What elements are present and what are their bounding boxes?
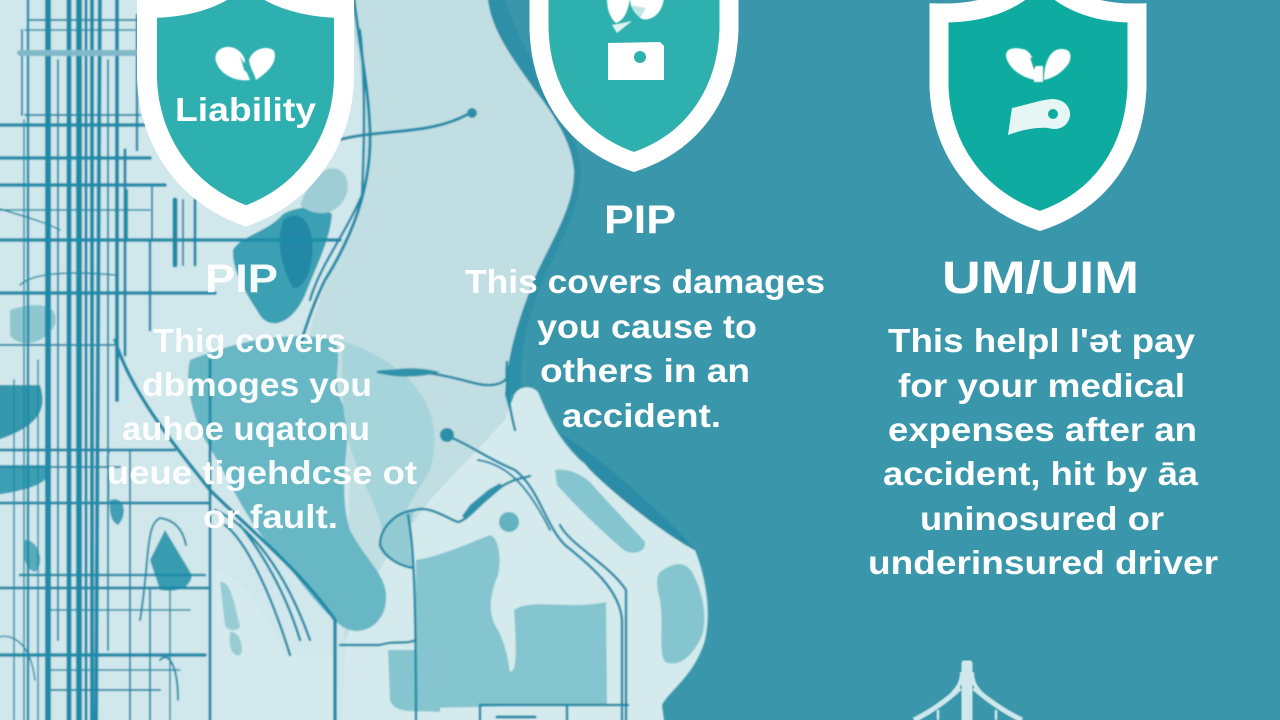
description [465, 263, 825, 434]
description: you cause to [537, 308, 757, 345]
diagonal arterial [115, 340, 335, 720]
description: accident. [562, 397, 721, 434]
coast shadow [488, 0, 581, 395]
map: narrow lake [378, 368, 440, 377]
shield: UM/UIM [939, 0, 1137, 221]
description: for your medical [898, 367, 1185, 404]
description: This helpl l'ət pay [888, 322, 1196, 359]
shoreline roads [300, 0, 370, 345]
description: accident, hit by āa [883, 455, 1199, 492]
heading: PIP [604, 198, 676, 242]
land: lower pale peninsula [340, 387, 708, 720]
description [107, 322, 417, 535]
shield body [939, 0, 1137, 221]
column 1 text: PIP [107, 257, 417, 535]
coast dark edge lower [558, 432, 698, 552]
description: expenses after an [888, 411, 1197, 448]
map: river fattening [462, 483, 503, 520]
land block: lower left pale [215, 570, 337, 720]
description [868, 322, 1218, 581]
land blob: long coastal [555, 470, 645, 553]
winding creek [450, 437, 622, 720]
icon: wallet card [608, 42, 664, 80]
map: pond marker creek head [440, 428, 454, 442]
description: auhoe uqatonu [122, 410, 370, 447]
description: others in an [540, 352, 750, 389]
water: medium bay lower left [188, 336, 386, 631]
description: uninosured or [920, 500, 1164, 537]
description: ueue tigehdcse ot [107, 454, 417, 491]
land blob: lens inlet [380, 510, 415, 568]
icon: heart handshake [215, 47, 275, 80]
vertical thick roads [45, 0, 51, 720]
description: dbmoges you [142, 366, 372, 403]
heading: UM/UIM [942, 252, 1139, 303]
land blob: lower central green [416, 535, 607, 708]
description: or fault. [203, 498, 338, 535]
heading: PIP [205, 257, 278, 301]
land blob: small pond [499, 512, 519, 532]
description: This covers damages [465, 263, 825, 300]
icon: heart fragment [607, 0, 664, 33]
map: pond marker near road end [467, 108, 477, 118]
water: dark lake left middle [233, 207, 332, 323]
shield body [147, 0, 344, 216]
water: blobs on street grid [0, 385, 43, 445]
column 3 text: UM/UIM [868, 252, 1218, 581]
column 2 text: PIP [465, 198, 825, 434]
land blob: south coastal [657, 564, 704, 663]
shield body [539, 0, 729, 162]
map: streets [0, 0, 628, 720]
icon: speech tag [1008, 99, 1070, 135]
land: upper pale area [0, 0, 574, 720]
map: land and water shapes [0, 0, 708, 720]
icon: heart handshake [1006, 48, 1071, 82]
description: Thig covers [153, 322, 346, 359]
shield label: Liability [175, 91, 317, 128]
description: underinsured driver [868, 544, 1218, 581]
icon: suspension bridge [914, 664, 1022, 720]
land: left street grid base [0, 0, 364, 720]
shield: Liability [147, 0, 344, 216]
shield: PIP [539, 0, 729, 162]
